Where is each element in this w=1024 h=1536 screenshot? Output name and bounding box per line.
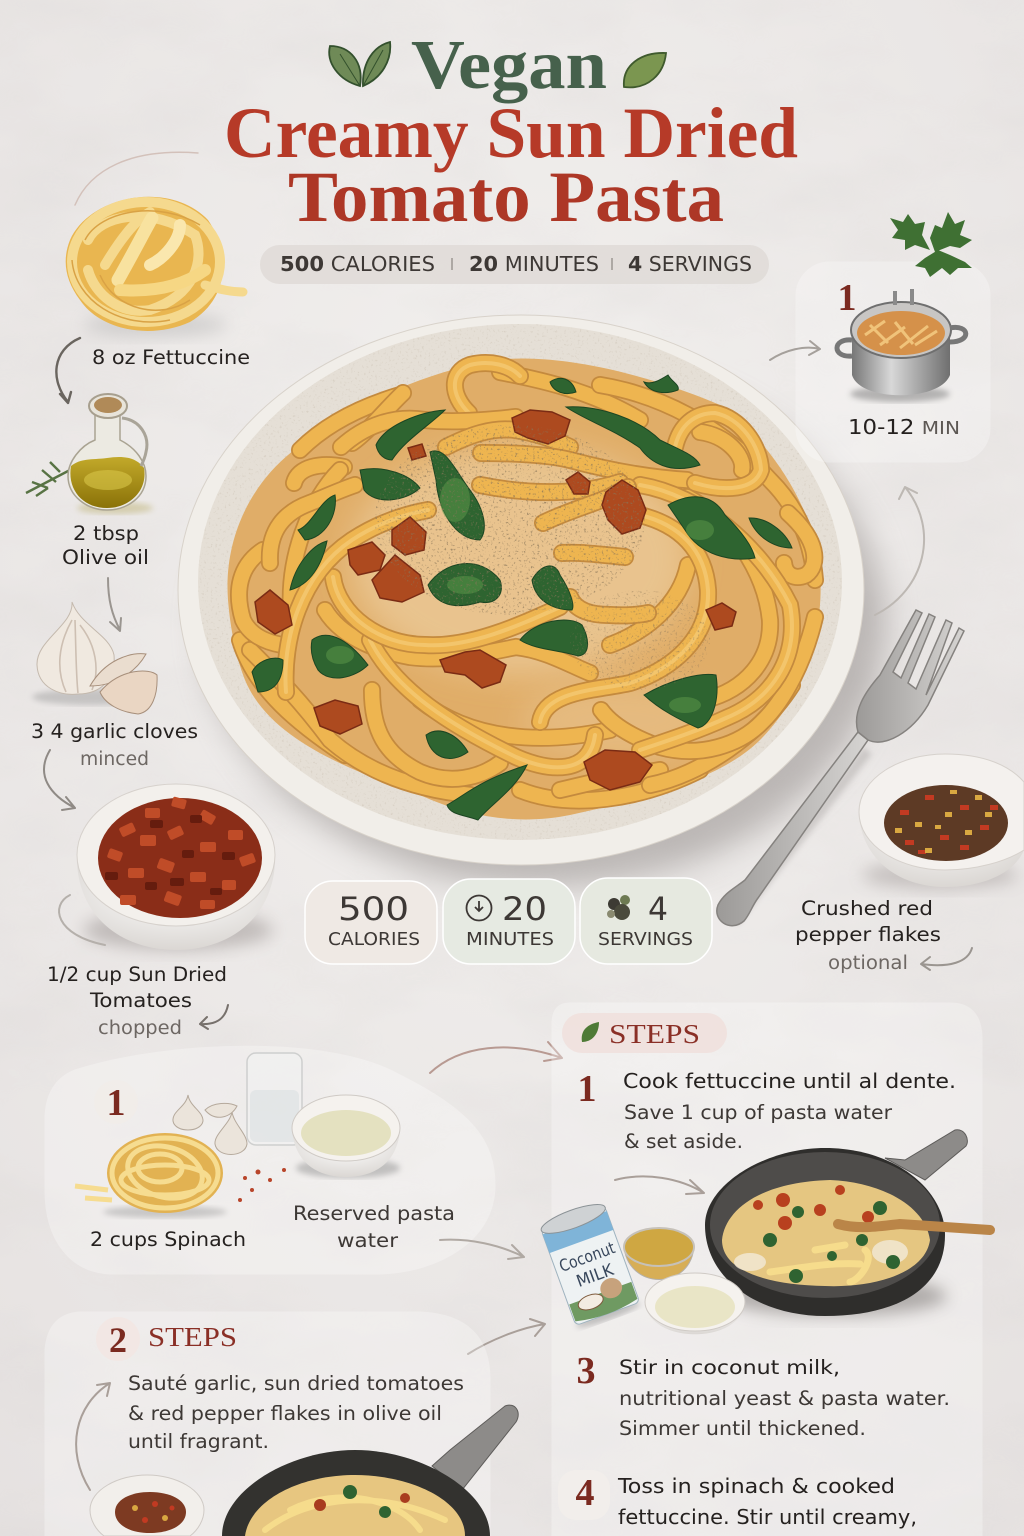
stat card: calories	[305, 881, 437, 964]
heading: Creamy Sun Dried: Creamy Sun Dried	[224, 93, 798, 173]
label: spinach: 2 cups Spinach	[90, 1228, 246, 1251]
label: 3 4 garlic cloves	[31, 720, 198, 743]
stat card: minutes: 20	[502, 890, 547, 928]
steps tag: STEPS	[609, 1019, 700, 1049]
fork	[717, 610, 964, 926]
stat card: servings	[580, 878, 712, 964]
label: 8 oz Fettuccine	[92, 346, 250, 369]
icon: water glass	[247, 1053, 302, 1145]
step 4 text: Toss in spinach & cooked	[617, 1474, 895, 1498]
step 3 text: 3	[576, 1350, 596, 1392]
sun dried tomato pieces	[255, 410, 736, 790]
icon: coconut milk can	[538, 1199, 642, 1331]
heading: Tomato Pasta: Tomato Pasta	[288, 157, 724, 237]
ingredient: olive oil: Olive oil	[62, 546, 149, 569]
step 1 text: Save 1 cup of pasta water	[624, 1101, 893, 1124]
arrow: optional	[921, 948, 972, 970]
arrow: oil to garlic	[108, 578, 121, 631]
body text	[128, 1372, 464, 1453]
heading: Vegan: Vegan	[411, 27, 607, 104]
body text: until fragrant.	[128, 1430, 269, 1453]
ingredient: garlic	[31, 602, 198, 770]
sauce base	[227, 359, 821, 819]
ingredient: sun dried tomatoes bowl: Tomatoes	[89, 989, 192, 1012]
left panel: step 2	[45, 1312, 518, 1536]
decorative arrow: top swirl	[75, 152, 198, 205]
stat card: calories: 500	[338, 890, 409, 928]
pot card	[796, 212, 990, 462]
right panel: steps	[538, 1003, 990, 1536]
heading: STEPS	[148, 1322, 237, 1352]
icon: coconut milk can: MILK	[574, 1260, 617, 1291]
arrow: to pot	[770, 341, 820, 360]
icon: right leaf	[624, 53, 666, 87]
arrow: curl up to pot	[875, 487, 924, 615]
stat card: minutes: MINUTES	[466, 930, 554, 950]
step 4 text: 4	[576, 1472, 594, 1514]
stats pill: 4 SERVINGS	[628, 252, 752, 276]
icon: garlic	[173, 1095, 247, 1154]
step 3 text: nutritional yeast & pasta water.	[619, 1387, 950, 1410]
ingredient: crushed red pepper flakes: pepper flakes	[795, 923, 941, 946]
left panel: step 1 ingredients: water	[337, 1229, 399, 1252]
arrow: reserved water to steps	[440, 1240, 524, 1259]
step 4 text	[558, 1470, 917, 1529]
icon: skillet	[222, 1405, 518, 1536]
label: reserved pasta water: Reserved pasta	[293, 1202, 455, 1225]
stat card: servings: SERVINGS	[598, 930, 693, 950]
arrow: nest to oil	[56, 338, 80, 403]
spinach leaves	[252, 375, 792, 820]
ingredient: olive oil	[26, 394, 153, 569]
pasta strands	[239, 363, 815, 800]
stats pill	[260, 245, 769, 284]
cracked pepper specks	[375, 425, 645, 615]
label: Crushed red	[801, 897, 933, 920]
icon: coconut milk can: Coconut	[557, 1238, 618, 1276]
step 4 text: fettuccine. Stir until creamy,	[618, 1505, 917, 1529]
ingredient: crushed red pepper flakes: optional	[828, 953, 908, 974]
step 3 text: Simmer until thickened.	[619, 1417, 866, 1440]
steps tag	[562, 1013, 727, 1053]
stat card: calories: CALORIES	[328, 930, 420, 950]
arrow	[76, 1383, 110, 1490]
arrow: tomato curl	[59, 895, 105, 945]
title	[224, 27, 798, 237]
arrow: garlic to tomatoes	[44, 750, 75, 810]
arrow: step 2 to steps	[468, 1319, 545, 1354]
left panel: step 1 ingredients	[45, 1046, 495, 1274]
left panel: step 2: 2	[109, 1320, 127, 1360]
ingredient: fettuccine nest	[66, 197, 250, 369]
ingredient: garlic: minced	[80, 749, 149, 770]
arrow: panel to steps	[430, 1042, 562, 1073]
number	[96, 1317, 140, 1361]
ingredient: sun dried tomatoes bowl: chopped	[98, 1018, 182, 1039]
arrow	[615, 1176, 704, 1194]
chili specks	[238, 1168, 286, 1202]
plate of pasta	[178, 315, 885, 887]
label: 10-12 MIN	[848, 415, 960, 439]
icon: pasta water bowl	[645, 1273, 745, 1334]
stat card: minutes	[443, 879, 575, 964]
number: 1	[838, 277, 856, 319]
step 1 text: & set aside.	[624, 1130, 743, 1153]
label: 2 tbsp	[73, 522, 139, 545]
number	[94, 1080, 138, 1124]
icon: skillet with pasta	[705, 1130, 990, 1316]
icon: parsley	[890, 212, 972, 277]
icon: nutritional yeast bowl	[624, 1228, 694, 1280]
icon: pasta water bowl	[292, 1095, 400, 1178]
left panel: step 1 ingredients: 1	[106, 1082, 126, 1124]
stat card: servings: 4	[648, 890, 668, 928]
step 3 text	[576, 1350, 950, 1440]
step 1 text	[578, 1068, 956, 1153]
stats pill: 500 CALORIES	[280, 252, 435, 276]
ingredient: crushed red pepper flakes	[795, 754, 1024, 974]
label: 1/2 cup Sun Dried	[47, 963, 227, 986]
icon: small flakes bowl	[90, 1475, 204, 1536]
stats pill: 20 MINUTES	[469, 252, 599, 276]
icon: fettuccine nest	[75, 1133, 227, 1218]
step 1 text: Cook fettuccine until al dente.	[623, 1069, 956, 1093]
body text: Sauté garlic, sun dried tomatoes	[128, 1372, 464, 1395]
ingredient: sun dried tomatoes bowl	[47, 784, 275, 1039]
body text: & red pepper flakes in olive oil	[128, 1402, 442, 1425]
arrow: chopped	[200, 1005, 228, 1029]
icon: left leaves	[329, 42, 390, 86]
icon: pot	[837, 289, 966, 402]
step 3 text: Stir in coconut milk,	[619, 1356, 840, 1379]
step 1 text: 1	[578, 1068, 596, 1110]
